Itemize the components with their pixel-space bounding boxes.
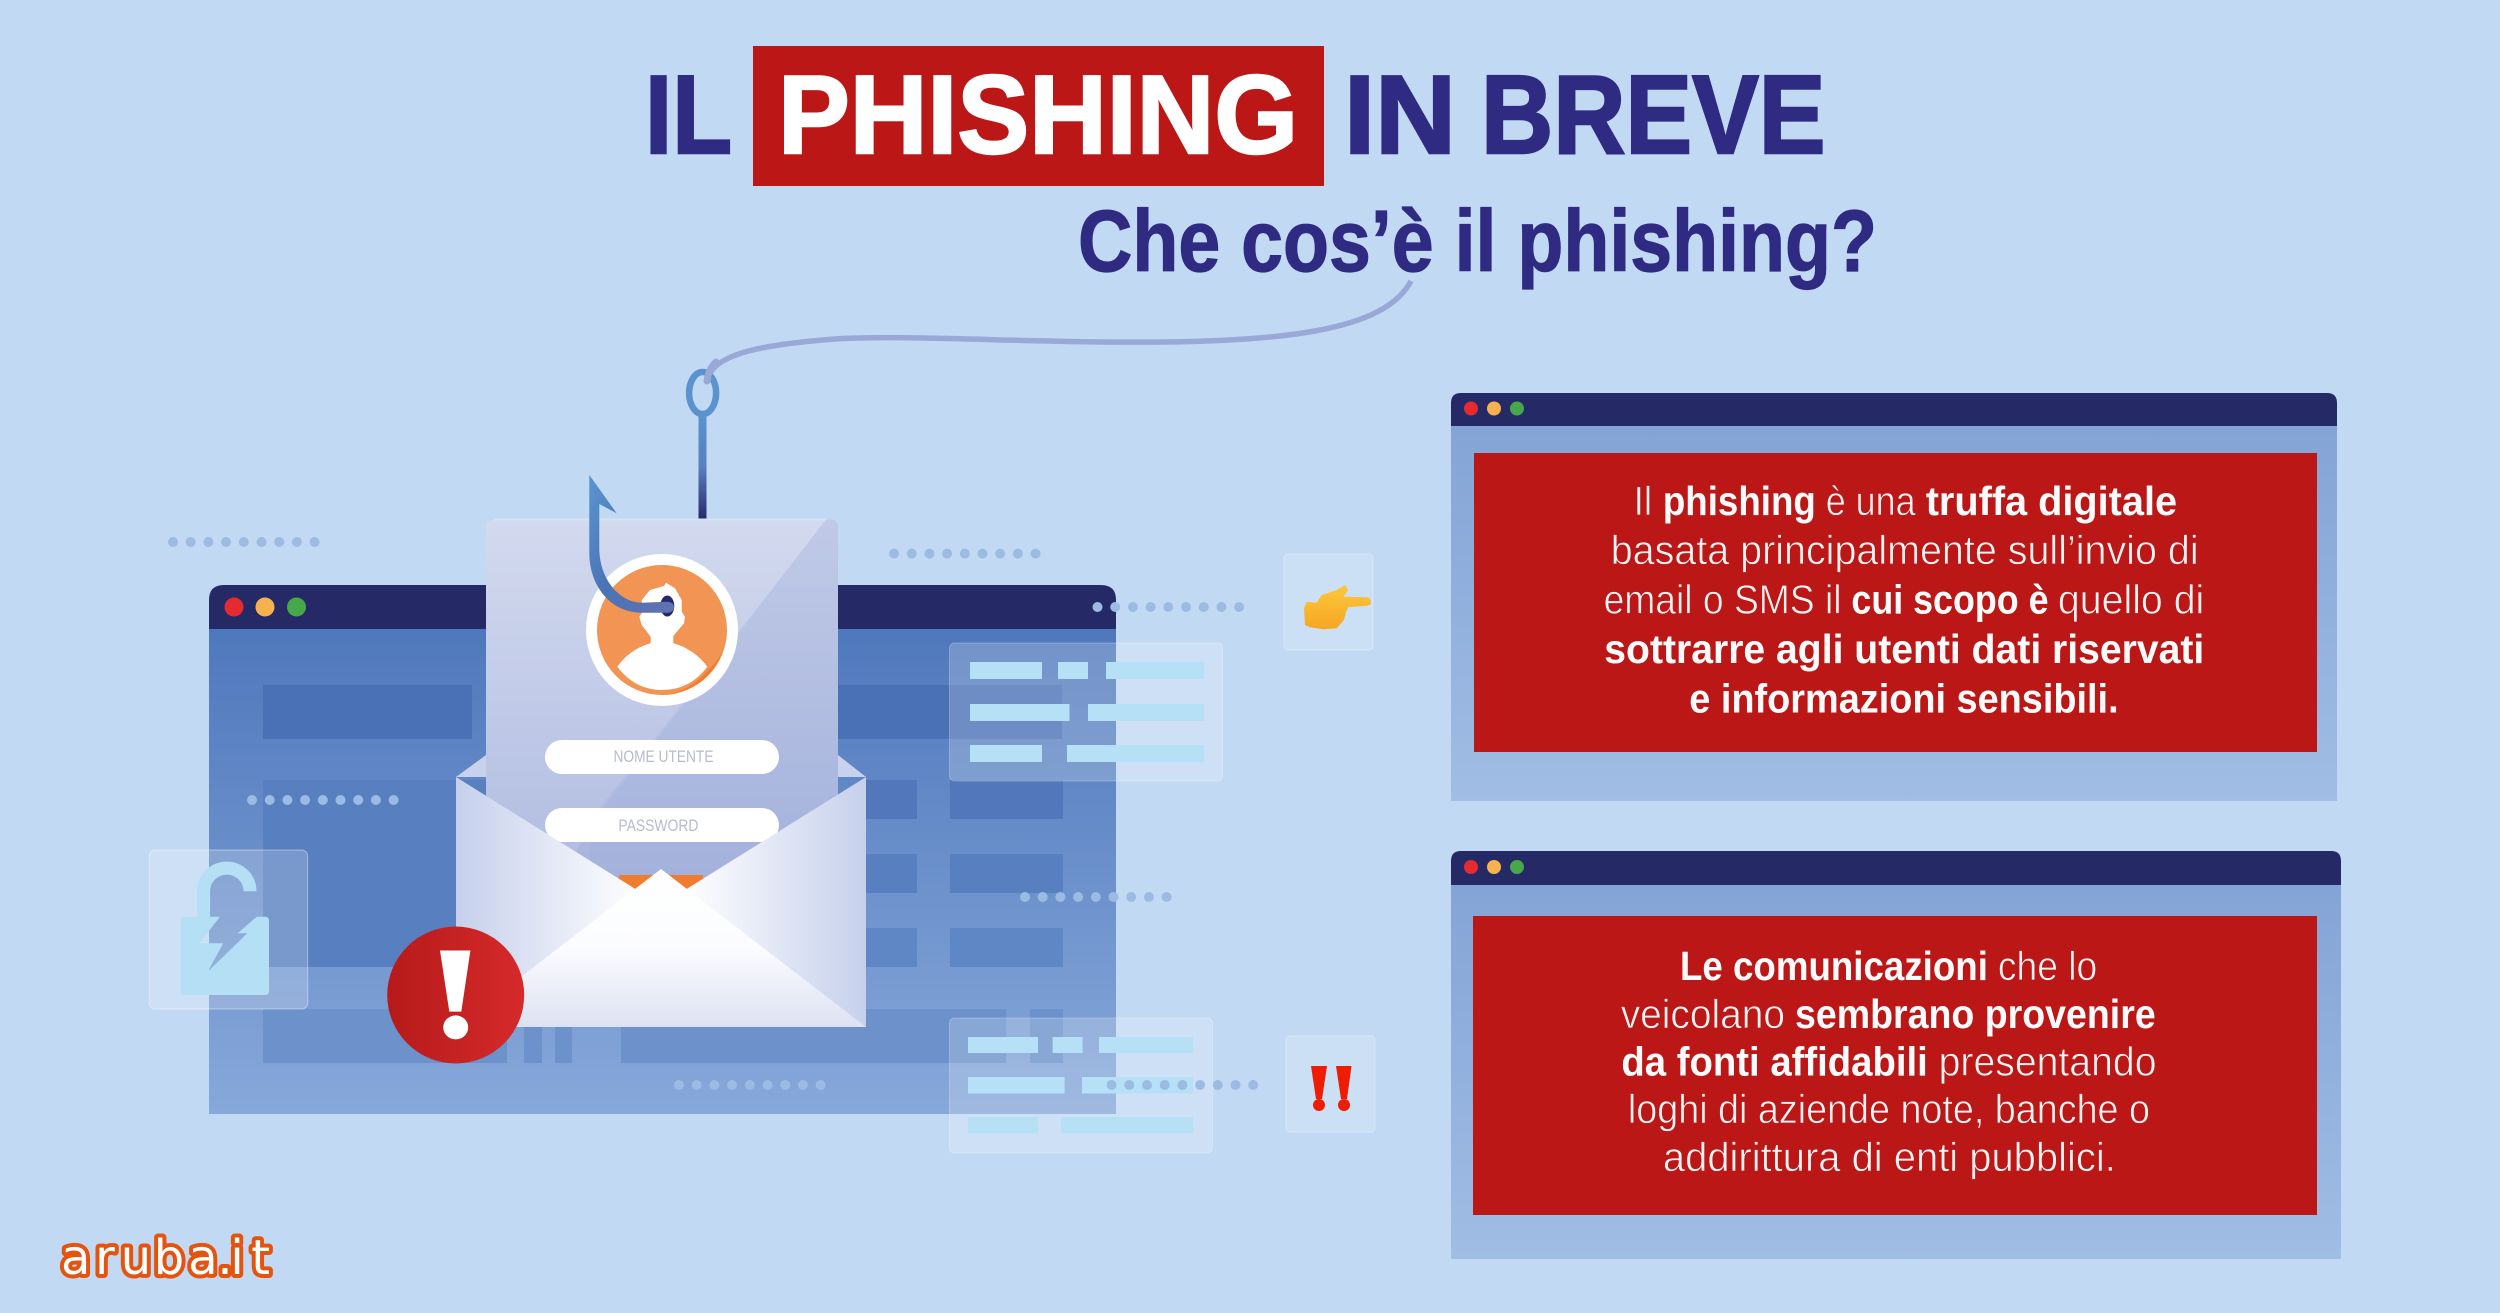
definition text: è una xyxy=(1826,478,1916,524)
communications text: loghi di aziende note, banche o xyxy=(1628,1086,2150,1132)
title: BREVE xyxy=(1481,53,1826,177)
definition text: Il xyxy=(1634,478,1652,524)
logo: aruba.it xyxy=(61,1230,270,1286)
communications text: da fonti affidabili xyxy=(1621,1038,1928,1084)
communications text: Le comunicazioni xyxy=(1680,943,1988,989)
password field xyxy=(545,808,779,842)
icon: fishing hook shank xyxy=(689,372,716,520)
panel: communications window xyxy=(1451,851,2341,1259)
password field: PASSWORD xyxy=(618,816,698,835)
title: IN xyxy=(1344,53,1456,177)
icon: alert badge xyxy=(387,926,524,1064)
icon: double exclamation panel xyxy=(1286,1036,1375,1132)
envelope back flaps xyxy=(456,755,866,777)
title xyxy=(645,46,1826,186)
icon: fishing hook point xyxy=(589,475,674,616)
definition text: email o SMS il xyxy=(1604,576,1842,622)
communications text: presentando xyxy=(1939,1038,2156,1084)
browser window dots xyxy=(224,598,306,616)
definition text: e informazioni sensibili. xyxy=(1689,676,2119,722)
envelope flaps xyxy=(456,777,866,1027)
login card xyxy=(486,520,838,960)
communications text: sembrano provenire xyxy=(1795,991,2156,1037)
icon: pointing hand panel xyxy=(1284,554,1373,650)
username field: NOME UTENTE xyxy=(614,747,714,766)
communications text: addirittura di enti pubblici. xyxy=(1663,1134,2116,1180)
panel: code snippet bottom xyxy=(950,1018,1212,1153)
window dots xyxy=(1464,402,1524,416)
line over hook eye xyxy=(707,362,716,381)
definition text: sottrarre agli utenti dati riservati xyxy=(1604,626,2204,672)
orange inner band xyxy=(619,875,703,905)
title: IL xyxy=(645,53,732,177)
definition text: cui scopo è xyxy=(1851,576,2048,622)
icon: open padlock panel xyxy=(149,850,308,1009)
communications text xyxy=(1621,943,2156,1180)
browser window illustration xyxy=(209,585,1116,1114)
subtitle: Che cos’è il phishing? xyxy=(1078,193,1877,290)
dotted lines behind xyxy=(168,537,1172,1090)
title: PHISHING xyxy=(778,53,1298,177)
dotted lines front xyxy=(1092,602,1258,1090)
communications text: veicolano xyxy=(1621,991,1785,1037)
panel: definition window xyxy=(1451,393,2337,801)
panel: code snippet top xyxy=(950,643,1222,781)
envelope front fold xyxy=(456,869,866,1027)
username field xyxy=(545,740,779,774)
window dots xyxy=(1464,860,1524,874)
communications text: che lo xyxy=(1998,943,2097,989)
definition text xyxy=(1604,478,2204,722)
avatar xyxy=(586,554,738,706)
definition text: truffa digitale xyxy=(1926,478,2177,524)
definition text: phishing xyxy=(1663,478,1816,524)
envelope with login card xyxy=(456,520,866,1027)
fishing line xyxy=(707,281,1411,381)
definition text: quello di xyxy=(2058,576,2204,622)
definition text: basata principalmente sull’invio di xyxy=(1611,527,2199,573)
